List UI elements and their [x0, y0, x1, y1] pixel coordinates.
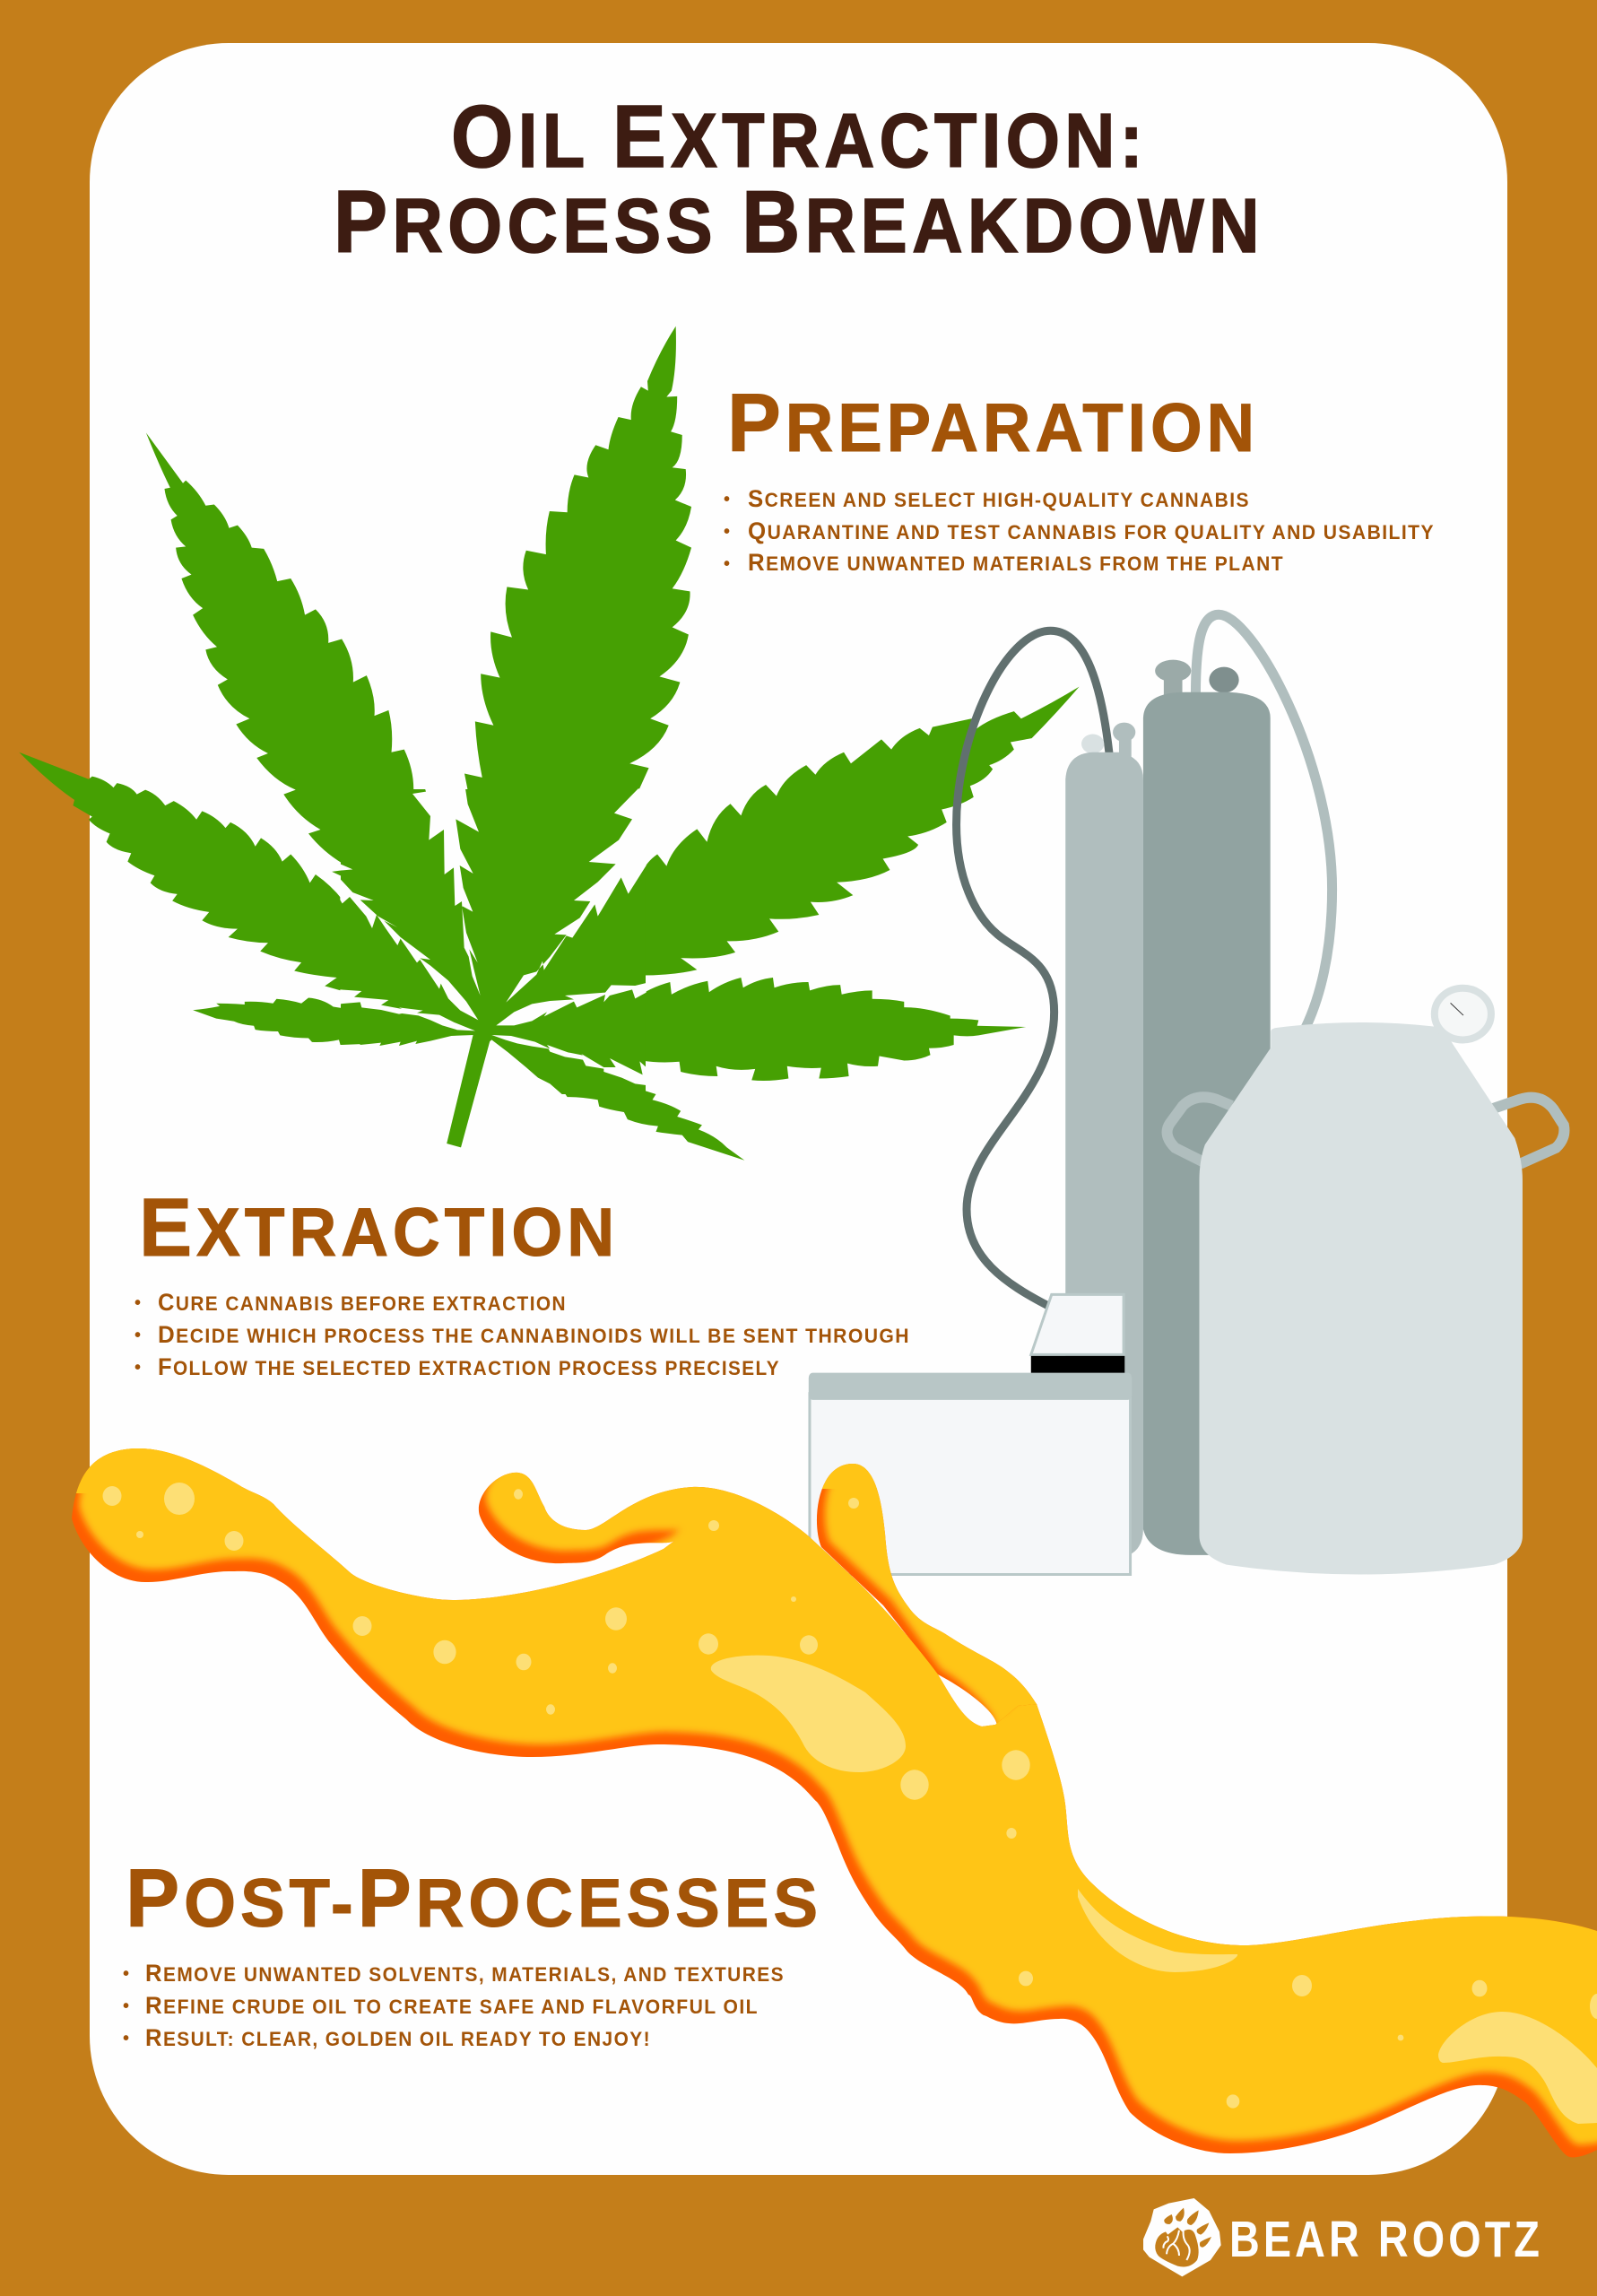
- bullet list: Post-Processes: •: [123, 2029, 129, 2048]
- oil spill: [54, 1426, 1597, 2170]
- bullet list: Extraction: DECIDE WHICH PROCESS THE CANNABINOIDS WILL BE SENT THROUGH: [158, 1321, 910, 1348]
- bullet list: Post-Processes: •: [123, 1964, 129, 1984]
- heading: Preparation: PREPARATION: [727, 378, 1259, 469]
- small tank: [1065, 723, 1143, 1555]
- bullet list: Post-Processes: REMOVE UNWANTED SOLVENTS, MATERIALS, AND TEXTURES: [145, 1960, 785, 1987]
- oil: back finger and arm: [816, 1464, 1037, 1724]
- bullet list: Extraction: •: [135, 1326, 141, 1345]
- bullet list: Preparation: [724, 485, 1435, 576]
- icon: bear paw: [1143, 2198, 1221, 2276]
- oil highlights: [102, 1483, 1597, 2124]
- bullet list: Post-Processes: •: [123, 1996, 129, 2016]
- bullet list: Post-Processes: RESULT: CLEAR, GOLDEN OIL READY TO ENJOY!: [145, 2024, 651, 2051]
- leaflet: upper right: [603, 687, 1080, 982]
- bullet list: Post-Processes: REFINE CRUDE OIL TO CREATE SAFE AND FLAVORFUL OIL: [145, 1992, 759, 2019]
- oil: main body: [54, 1426, 1597, 2170]
- bullet list: Extraction: •: [135, 1358, 141, 1378]
- leaflet: left: [19, 752, 397, 995]
- bullet list: Extraction: •: [135, 1293, 141, 1313]
- oil: seam patch between arm and body: [995, 1706, 1051, 1762]
- bullet list: Preparation: QUARANTINE AND TEST CANNABIS FOR QUALITY AND USABILITY: [748, 517, 1435, 544]
- bullet list: Preparation: •: [724, 490, 730, 509]
- leaf hub: [341, 789, 646, 1094]
- bullet list: Preparation: •: [724, 522, 730, 542]
- logo: Bear Rootz: [1143, 2198, 1543, 2276]
- bullet list: Extraction: CURE CANNABIS BEFORE EXTRACTION: [158, 1289, 567, 1316]
- dark hose: [957, 631, 1109, 1306]
- white gaps between leaflets: [340, 788, 647, 1085]
- tall tank: [1143, 660, 1271, 1555]
- leaflet: upper left: [146, 432, 454, 904]
- bullet list: Preparation: SCREEN AND SELECT HIGH-QUALITY CANNABIS: [748, 485, 1250, 512]
- title: OIL EXTRACTION:: [451, 87, 1148, 186]
- heading: Post-Processes: POST-PROCESSES: [126, 1853, 822, 1944]
- pressure gauge: [1435, 988, 1491, 1039]
- bullet list: Preparation: •: [724, 554, 730, 574]
- leaflet: lower right: [553, 1072, 744, 1161]
- drum: [1199, 1022, 1523, 1574]
- box unit: [809, 1294, 1132, 1574]
- bullet list: Extraction: FOLLOW THE SELECTED EXTRACTION PROCESS PRECISELY: [158, 1353, 780, 1380]
- title: PROCESS BREAKDOWN: [334, 172, 1264, 271]
- right drum handle: [1492, 1098, 1564, 1164]
- leaflet: right: [624, 978, 1026, 1081]
- left drum handle: [1167, 1097, 1232, 1162]
- icon: cannabis leaf: [19, 326, 1080, 1161]
- title: [334, 87, 1264, 271]
- leaf stem: [447, 1032, 490, 1147]
- heading: Extraction: EXTRACTION: [139, 1182, 619, 1274]
- leaf centre with slits: [340, 788, 647, 1094]
- light hose: [1195, 614, 1332, 1028]
- bullet list: Preparation: REMOVE UNWANTED MATERIALS FROM THE PLANT: [748, 549, 1284, 576]
- equipment: gas tanks, drum and box: [809, 614, 1564, 1574]
- leaflet: lower left: [193, 997, 369, 1045]
- bullet list: Extraction: [135, 1289, 910, 1380]
- bullet list: Post-Processes: [123, 1960, 785, 2051]
- leaflet: top centre: [464, 326, 691, 1015]
